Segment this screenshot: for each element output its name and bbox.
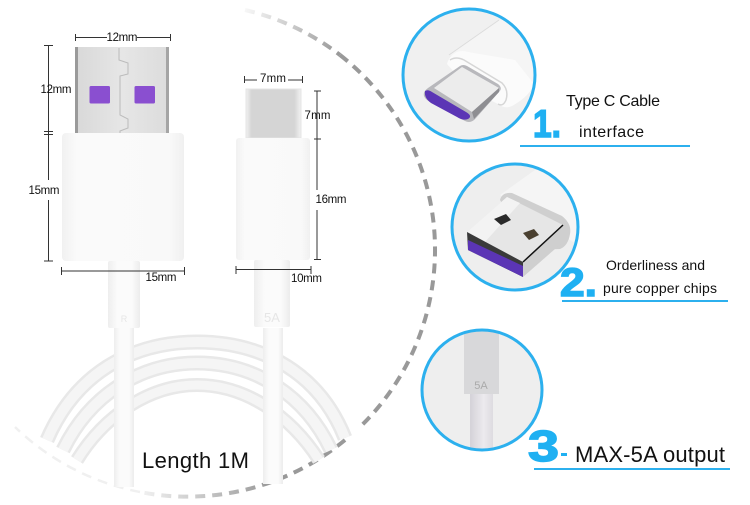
R mark: R <box>121 314 128 324</box>
front face <box>467 232 523 277</box>
USB-A cable <box>114 328 134 487</box>
callout 2: USB chips: pure copper chips <box>603 280 717 296</box>
dimension: USB body width 15mm <box>62 267 184 284</box>
circle 1 photo <box>404 10 534 140</box>
Type-C cable <box>263 328 283 484</box>
circle 2 ring <box>452 164 578 290</box>
coiled cable <box>47 342 345 460</box>
circle 1 ring <box>403 9 535 141</box>
boot collar <box>500 193 570 250</box>
purple tongue <box>425 90 470 120</box>
cable body <box>449 20 560 90</box>
dimension: Type-C width 10mm <box>236 266 322 285</box>
callout 2: USB chips <box>450 160 728 305</box>
USB-A connector <box>62 47 184 487</box>
Type-C metal tip <box>246 89 301 138</box>
caption 1: Type C Cable <box>566 93 660 110</box>
top face <box>509 204 562 250</box>
dimension: USB body height 15mm: 15mm <box>28 185 60 197</box>
circle 3 ring <box>422 330 542 450</box>
circle 3 photo: 5A <box>474 380 488 392</box>
holes <box>494 214 511 225</box>
underline 2 <box>562 300 728 302</box>
housing <box>447 56 532 107</box>
Type-C strain relief <box>254 260 290 327</box>
callout 1: Type C interface <box>400 5 690 147</box>
dimension: Type-C height 7mm and 16mm: 16mm <box>316 194 346 206</box>
circle 3 photo <box>424 332 540 448</box>
callout 3: max 5A <box>420 328 730 471</box>
number 2: 2. <box>560 261 597 305</box>
circle 2 photo <box>454 166 576 288</box>
dimension: USB width 12mm: 12mm <box>106 32 138 44</box>
dimension: Type-C width 10mm: 10mm <box>291 273 322 285</box>
dimension: USB width 12mm <box>76 32 170 44</box>
Type-C connector <box>236 89 310 484</box>
number 1: 1. <box>533 103 561 146</box>
length label: Length 1M <box>142 448 249 473</box>
dimension: USB tip height 12mm: 12mm <box>40 84 72 96</box>
dimension: Type-C height 7mm and 16mm <box>304 91 346 260</box>
Type-C plastic housing <box>236 138 310 260</box>
dimension: USB tip height 12mm <box>28 46 72 261</box>
metal shell <box>424 65 501 122</box>
dimension: USB body width 15mm: 15mm <box>146 272 176 284</box>
5A mark: 5A <box>264 310 280 325</box>
caption 2: Orderliness and <box>606 257 705 273</box>
dimension: Type-C height 7mm and 16mm: 7mm <box>304 110 330 122</box>
underline 1 <box>520 145 690 147</box>
caption 3: MAX-5A output <box>575 442 725 467</box>
callout 1: Type C interface: interface <box>579 124 644 141</box>
number 3: 3 <box>528 422 559 471</box>
dash <box>561 453 567 456</box>
USB-A metal tip <box>75 47 169 134</box>
USB-A strain relief <box>108 261 140 328</box>
dimension: Type-C width 7mm: 7mm <box>260 73 286 85</box>
underline 3 <box>534 468 730 470</box>
USB-A plastic housing <box>62 133 184 261</box>
dashed circle outline <box>15 10 435 497</box>
side face <box>523 249 554 277</box>
dimension: Type-C width 7mm <box>244 73 302 85</box>
